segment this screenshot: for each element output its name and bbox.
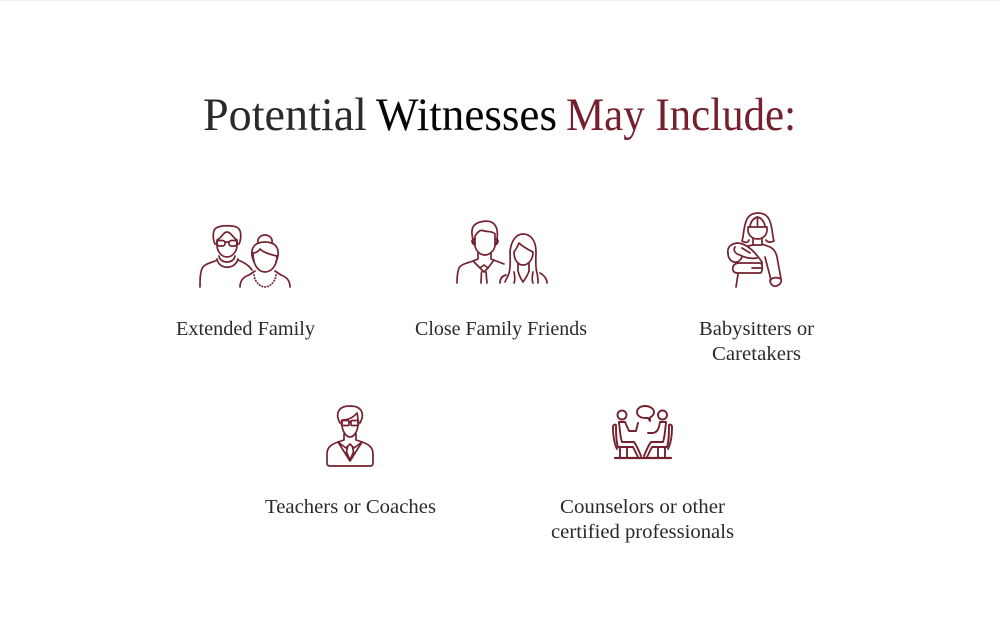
icon: babysitter bbox=[728, 213, 781, 287]
icon: teacher bbox=[327, 406, 373, 466]
label: babysitters or caretakers: Caretakers bbox=[712, 343, 801, 365]
title: May Include: bbox=[566, 89, 796, 141]
label: extended family: Extended Family bbox=[176, 318, 315, 340]
icon: extended family bbox=[200, 226, 290, 287]
label: counselors or other certified professionals: Counselors or other bbox=[560, 496, 725, 518]
label: teachers or coaches: Teachers or Coaches bbox=[265, 496, 436, 518]
icon: close family friends bbox=[457, 221, 547, 283]
label: counselors or other certified professionals: certified professionals bbox=[551, 521, 734, 543]
icon: counseling bbox=[613, 406, 672, 458]
label: close family friends: Close Family Friends bbox=[415, 318, 587, 340]
label: babysitters or caretakers: Babysitters or bbox=[699, 318, 814, 340]
label: babysitters or caretakers bbox=[699, 318, 814, 365]
title: Potential bbox=[203, 89, 367, 141]
title: Witnesses bbox=[376, 89, 557, 141]
title bbox=[203, 89, 796, 141]
label: counselors or other certified professionals bbox=[551, 496, 734, 543]
